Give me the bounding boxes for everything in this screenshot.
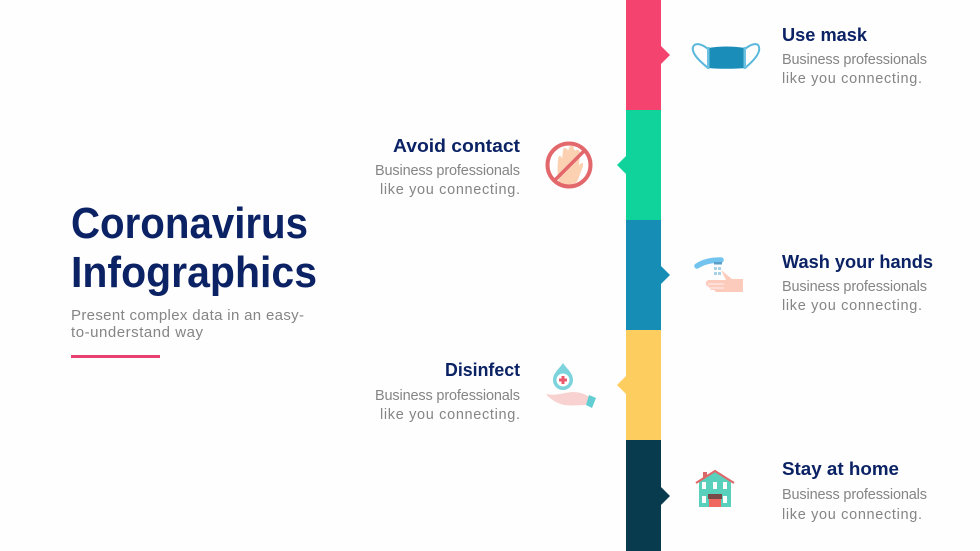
segment: disinfect bbox=[617, 330, 661, 440]
text: use mask: like you connecting. bbox=[782, 71, 922, 87]
icon: washing hands under tap bbox=[697, 260, 743, 292]
vertical timeline bbox=[617, 0, 670, 551]
text: disinfect: Business professionals bbox=[375, 388, 520, 404]
title underline bbox=[71, 355, 160, 358]
subtitle: Present complex data in an easy- bbox=[71, 307, 304, 324]
text: avoid contact: like you connecting. bbox=[380, 182, 520, 198]
segment: avoid contact bbox=[617, 110, 661, 220]
text: disinfect: like you connecting. bbox=[380, 407, 520, 423]
text: wash your hands bbox=[782, 251, 933, 314]
icon: sanitizer drop over hand bbox=[546, 363, 596, 408]
icon: face mask bbox=[693, 44, 759, 69]
segment: stay at home bbox=[626, 440, 670, 551]
icon: no-contact hand bbox=[548, 144, 590, 186]
text: stay at home: Stay at home bbox=[782, 458, 899, 479]
text: use mask: Use mask bbox=[782, 24, 868, 45]
text: use mask: Business professionals bbox=[782, 52, 927, 68]
icon: house bbox=[696, 471, 734, 507]
text: avoid contact: Business professionals bbox=[375, 163, 520, 179]
segment: use mask bbox=[626, 0, 670, 110]
text: use mask bbox=[782, 24, 927, 87]
subtitle: to-understand way bbox=[71, 324, 204, 341]
text: avoid contact: Avoid contact bbox=[393, 135, 520, 156]
title bbox=[71, 199, 317, 297]
text: wash your hands: Business professionals bbox=[782, 279, 927, 295]
title: Infographics bbox=[71, 248, 317, 297]
text: wash your hands: like you connecting. bbox=[782, 298, 922, 314]
text: wash your hands: Wash your hands bbox=[782, 251, 933, 272]
text: stay at home: like you connecting. bbox=[782, 507, 922, 523]
subtitle bbox=[71, 307, 304, 341]
text: avoid contact bbox=[375, 135, 520, 198]
title: Coronavirus bbox=[71, 199, 308, 248]
text: disinfect bbox=[375, 359, 520, 423]
text: stay at home: Business professionals bbox=[782, 487, 927, 503]
text: stay at home bbox=[782, 458, 927, 523]
segment: wash your hands bbox=[626, 220, 670, 330]
text: disinfect: Disinfect bbox=[445, 359, 520, 380]
